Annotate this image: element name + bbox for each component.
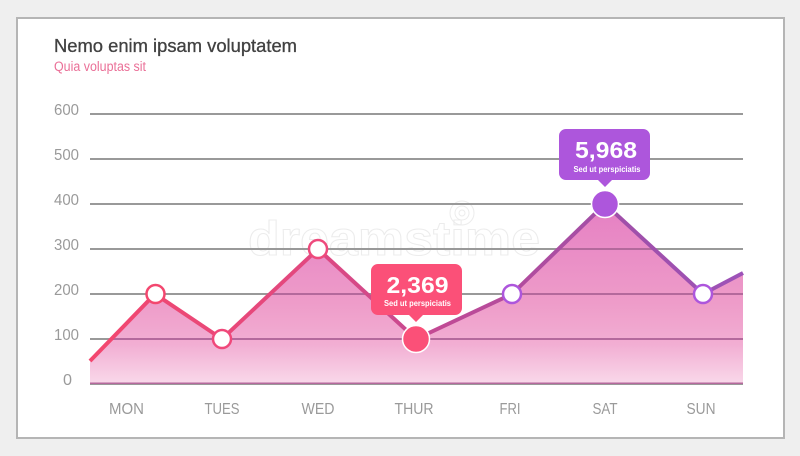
point: Sunday	[694, 285, 712, 303]
point: Saturday highlighted	[592, 190, 618, 218]
callout: Thursday: 2,369	[386, 272, 448, 298]
callout: Saturday: Sed ut perspiciatis	[574, 165, 641, 174]
y axis labels: 0	[63, 372, 72, 389]
point: Thursday highlighted	[402, 326, 430, 352]
point: Wednesday	[309, 240, 327, 258]
y axis labels: 200	[54, 282, 79, 299]
x axis labels: WED	[302, 401, 334, 418]
watermark: dreamstime	[248, 213, 540, 266]
x axis labels: FRI	[500, 401, 520, 418]
callout: Saturday	[559, 129, 650, 187]
subtitle: Quia voluptas sit	[54, 59, 146, 74]
point: Friday	[503, 285, 521, 303]
x axis labels	[109, 401, 716, 418]
title: Nemo enim ipsam voluptatem	[54, 36, 297, 56]
area fill	[90, 204, 743, 384]
x axis labels: TUES	[204, 401, 240, 418]
y axis labels: 600	[54, 102, 79, 119]
data line	[90, 204, 743, 361]
grid lines	[90, 114, 743, 384]
grid lines seen through area	[90, 249, 743, 384]
y axis labels	[54, 102, 79, 389]
callout: Saturday: 5,968	[575, 137, 637, 163]
x axis labels: THUR	[394, 401, 434, 418]
y axis labels: 300	[54, 237, 79, 254]
x axis labels: SAT	[592, 401, 618, 418]
data points	[146, 190, 712, 352]
callout: Thursday	[371, 264, 462, 322]
x axis labels: SUN	[686, 401, 716, 418]
point: Tuesday	[213, 330, 231, 348]
x axis labels: MON	[109, 401, 144, 418]
point: Monday	[146, 285, 164, 303]
y axis labels: 400	[54, 192, 79, 209]
y axis labels: 100	[54, 327, 79, 344]
callout: Thursday: Sed ut perspiciatis	[384, 299, 452, 308]
y axis labels: 500	[54, 147, 79, 164]
